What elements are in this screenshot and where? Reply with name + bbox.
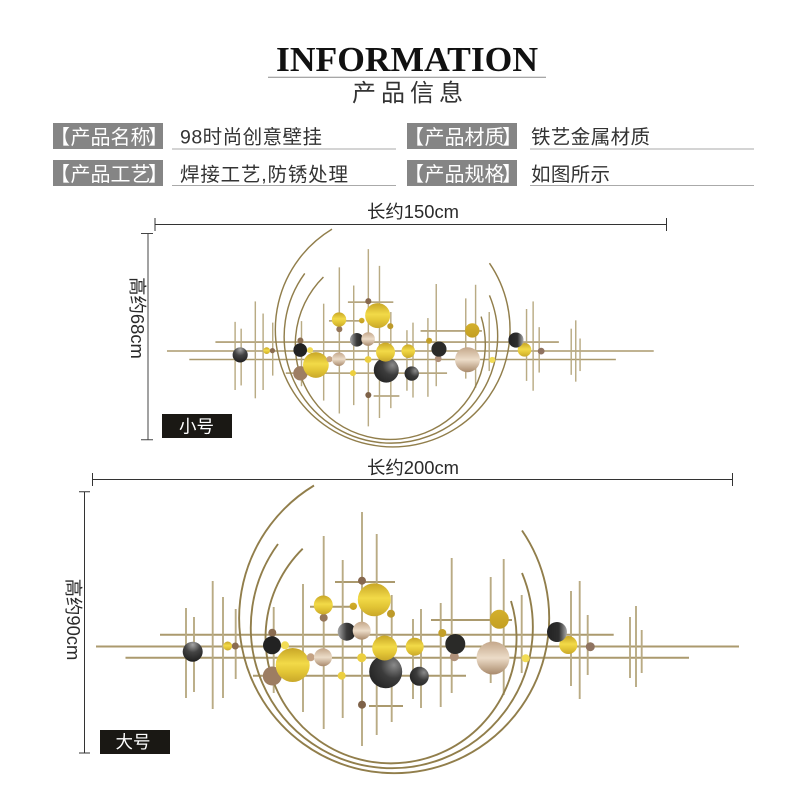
title: INFORMATION <box>276 40 538 79</box>
spec: product size: 【 <box>404 164 424 186</box>
spec: product name: 【 <box>50 127 70 149</box>
small size width dimension: 长约150cm <box>367 201 459 222</box>
small size tag <box>162 414 232 438</box>
small size width dimension <box>155 201 666 231</box>
large wall art <box>96 486 739 773</box>
spec: product size <box>404 160 754 186</box>
spec: product craft: 】 <box>148 164 168 186</box>
spec: product material: 铁艺金属材质 <box>531 126 650 148</box>
large size width dimension: 长约200cm <box>367 457 459 478</box>
small size height dimension: 高约68cm <box>127 277 148 359</box>
title: 产品信息 <box>352 80 463 107</box>
spec: product material: 】 <box>502 127 522 149</box>
spec: product size: 如图所示 <box>531 164 610 186</box>
title <box>268 40 546 107</box>
large size height dimension <box>63 492 90 753</box>
spec: product size: 】 <box>502 164 522 186</box>
spec: product craft: 产品工艺 <box>70 163 150 186</box>
spec: product material <box>404 123 754 149</box>
spec: product size: 产品规格 <box>424 163 504 186</box>
spec: product craft: 【 <box>50 164 70 186</box>
spec: product name: 98时尚创意壁挂 <box>180 126 322 148</box>
spec: product material: 产品材质 <box>424 126 504 149</box>
small size height dimension <box>127 234 153 440</box>
large size width dimension <box>92 457 732 486</box>
spec: product name <box>50 123 396 149</box>
large size tag: 大号 <box>116 732 150 752</box>
small size tag: 小号 <box>179 416 214 436</box>
spec: product name: 】 <box>148 127 168 149</box>
spec: product name: 产品名称 <box>70 126 150 149</box>
large size tag <box>100 730 170 754</box>
spec: product material: 【 <box>404 127 424 149</box>
spec: product craft: 焊接工艺,防锈处理 <box>180 164 348 186</box>
large size height dimension: 高约90cm <box>63 579 84 660</box>
spec: product craft <box>50 160 396 186</box>
small wall art <box>167 229 654 447</box>
